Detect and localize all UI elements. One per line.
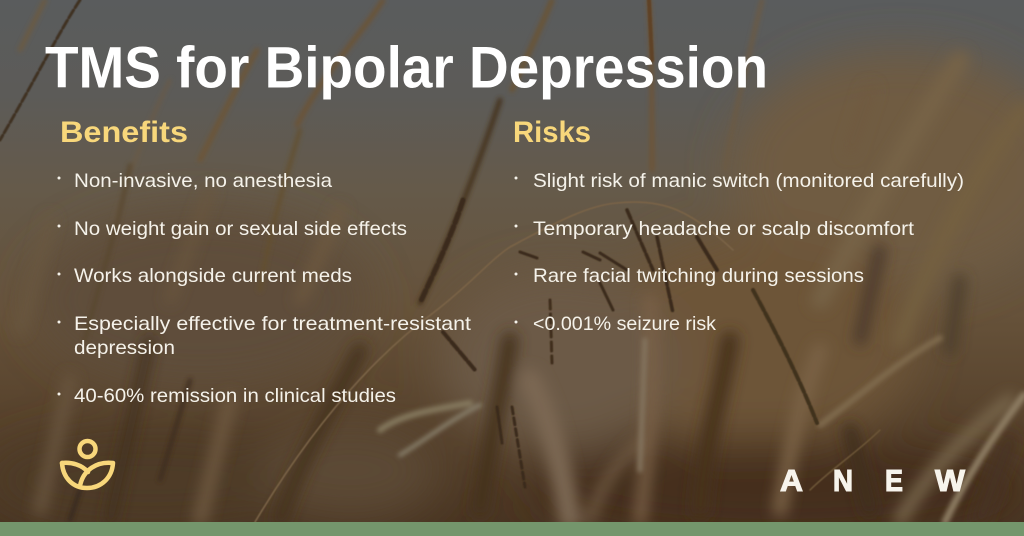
footer band: [0, 522, 1024, 536]
logo wordmark: ANEW: W: [935, 463, 966, 498]
risk 2: Temporary headache or scalp discomfort: [533, 218, 915, 240]
panel: risks: [513, 116, 964, 335]
logo wordmark: ANEW: [780, 463, 966, 498]
title: TMS for Bipolar Depression: [45, 36, 768, 100]
benefit 4: Especially effective for treatment-resistant: [74, 313, 472, 335]
heading: benefits: Benefits: [60, 116, 188, 149]
logo wordmark: ANEW: A: [780, 463, 803, 498]
risk 4: <0.001% seizure risk: [533, 313, 716, 335]
risk 3: Rare facial twitching during sessions: [533, 265, 864, 287]
benefit 5: 40-60% remission in clinical studies: [74, 385, 396, 407]
heading: risks: Risks: [513, 116, 591, 149]
panel: benefits: [58, 116, 472, 407]
benefit 1: Non-invasive, no anesthesia: [74, 170, 332, 192]
logo wordmark: ANEW: N: [833, 463, 853, 498]
icon: lotus logo: [62, 441, 113, 488]
benefit 4: depression: [74, 337, 175, 359]
risk 1: Slight risk of manic switch (monitored carefully): [533, 170, 964, 192]
benefit 4: [58, 313, 472, 359]
benefit 2: No weight gain or sexual side effects: [74, 218, 407, 240]
benefit 3: Works alongside current meds: [74, 265, 352, 287]
logo wordmark: ANEW: E: [885, 463, 903, 498]
